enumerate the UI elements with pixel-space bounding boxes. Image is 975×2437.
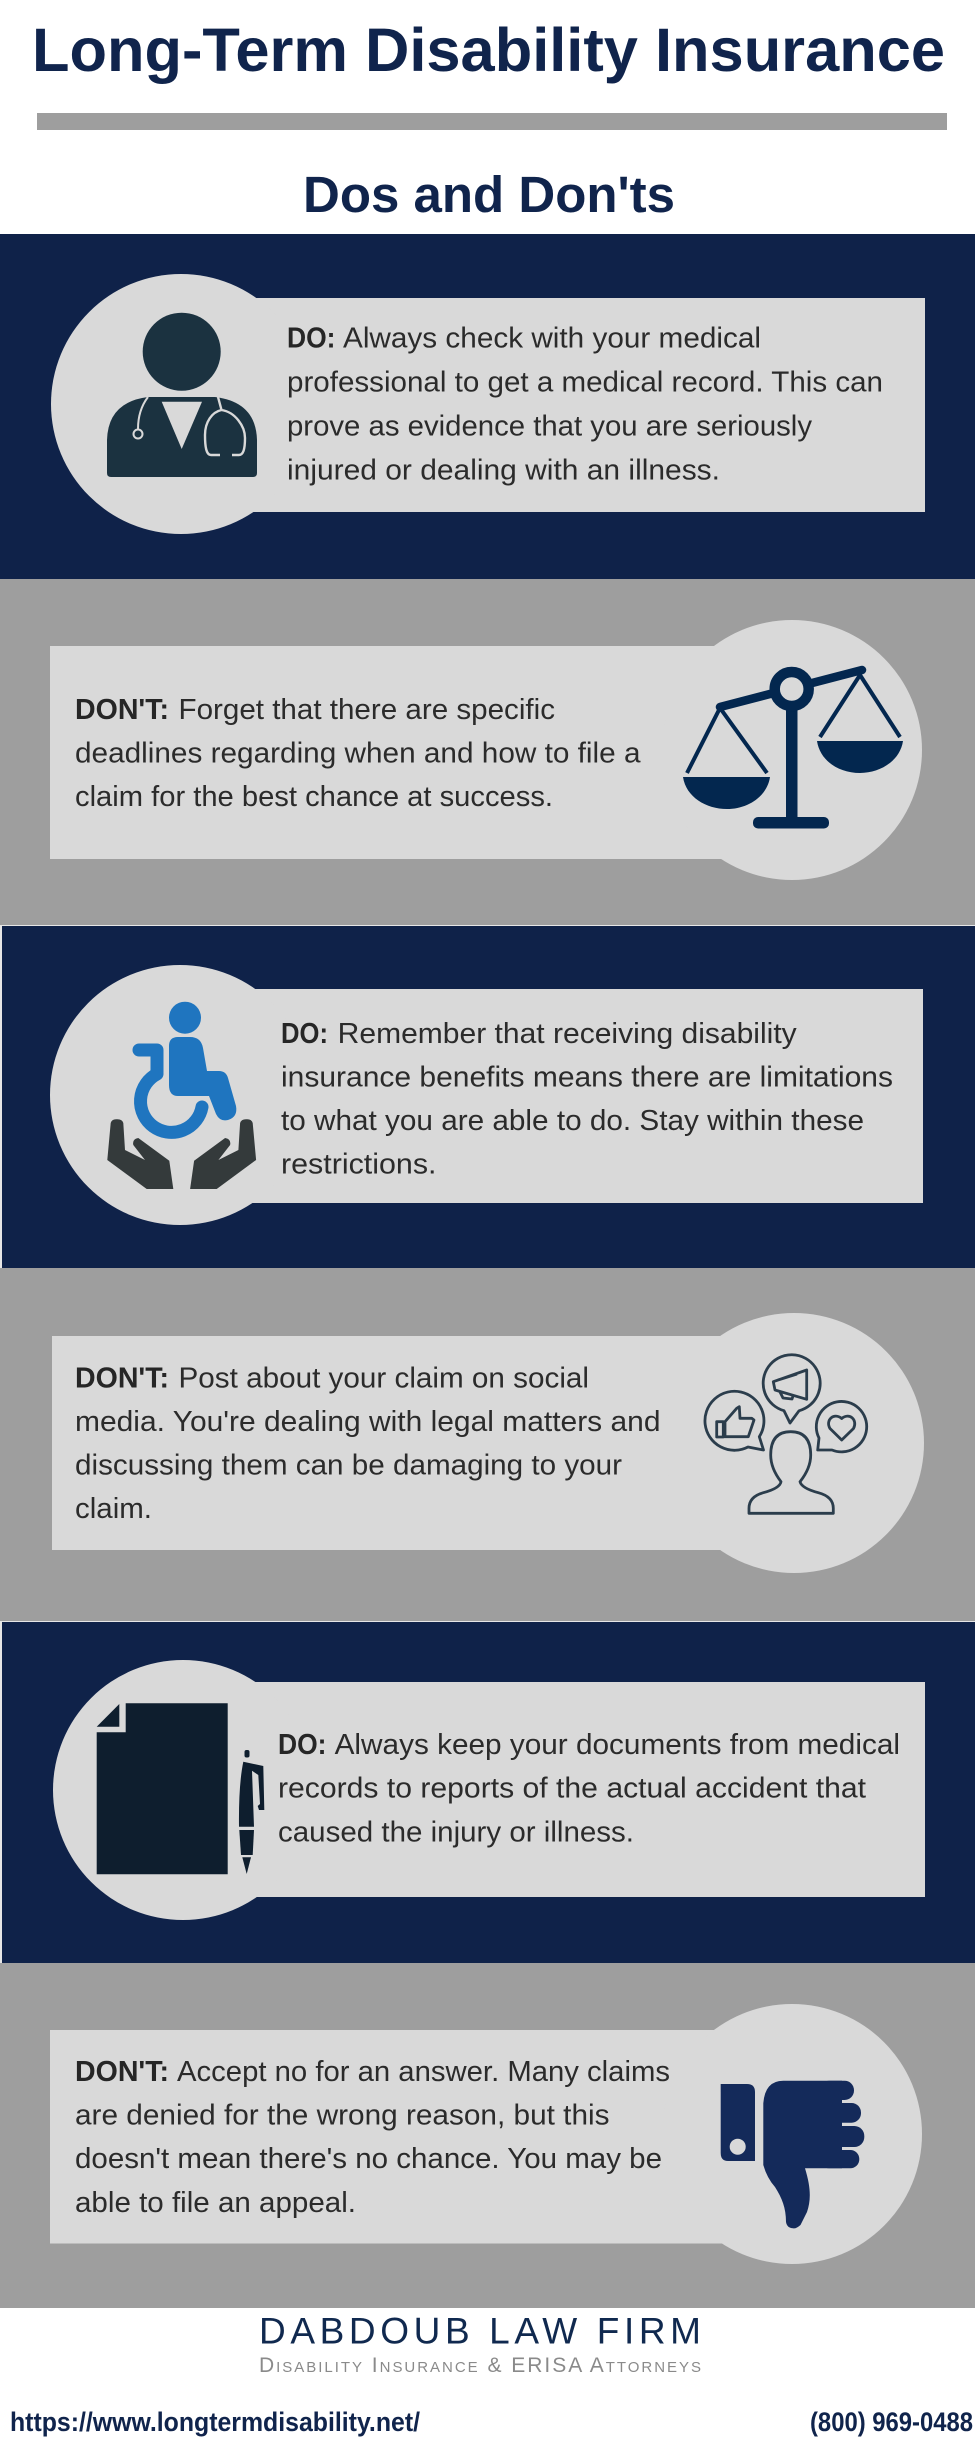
text: don't 3: [75, 2056, 670, 2219]
text: don't 3: able to file an appeal.: [75, 2187, 356, 2219]
icon: doctor: [107, 313, 257, 477]
panel: do, limitations: [0, 925, 975, 1268]
text: do 2: to what you are able to do. Stay within these: [281, 1105, 864, 1137]
text: do 3: Always keep your documents from medical: [335, 1729, 900, 1761]
text: do 1: professional to get a medical record. This can: [287, 366, 883, 398]
text: do 2: [281, 1018, 893, 1180]
icon: wheelchair in hands: [107, 1002, 256, 1189]
text: do 3: DO:: [278, 1729, 326, 1761]
icon: scales: [683, 670, 903, 828]
text: do 1: injured or dealing with an illness.: [287, 454, 720, 486]
panel: don't, deadlines: [0, 579, 975, 925]
text: don't 2: media. You're dealing with legal matters and: [75, 1406, 660, 1438]
panel: don't, social media: [0, 1268, 975, 1621]
text: do 3: [278, 1729, 900, 1849]
title: Long-Term Disability Insurance: [32, 16, 945, 84]
text: do 2: restrictions.: [281, 1148, 436, 1180]
text: don't 1: [75, 694, 641, 813]
text: don't 3: DON'T:: [75, 2056, 169, 2088]
text: do 1: Always check with your medical: [343, 322, 761, 354]
panel: do, medical record: [0, 234, 975, 579]
text: do 1: [287, 322, 883, 486]
text: don't 2: Post about your claim on social: [178, 1362, 589, 1394]
subtitle: Dos and Don'ts: [303, 166, 675, 223]
text: don't 3: doesn't mean there's no chance. You may be: [75, 2143, 662, 2175]
text: do 2: Remember that receiving disability: [338, 1018, 797, 1050]
panel: do, keep documents: [0, 1621, 975, 1963]
panel: don't, accept no: [0, 1963, 975, 2308]
text: do 1: prove as evidence that you are seriously: [287, 410, 812, 442]
footer: website: https://www.longtermdisability.net/: [10, 2407, 420, 2437]
text: don't 1: Forget that there are specific: [178, 694, 555, 726]
text: don't 2: DON'T:: [75, 1362, 169, 1394]
logo: tagline: Disability Insurance & ERISA Attorneys: [259, 2354, 701, 2377]
text: don't 2: discussing them can be damaging to your: [75, 1450, 622, 1482]
text: don't 2: claim.: [75, 1493, 152, 1525]
icon: document and pen: [97, 1703, 264, 1874]
text: don't 3: are denied for the wrong reason, but this: [75, 2099, 610, 2131]
icon: thumbs down: [721, 2081, 864, 2228]
text: don't 3: Accept no for an answer. Many claims: [177, 2056, 670, 2088]
text: do 2: DO:: [281, 1018, 328, 1050]
text: do 2: insurance benefits means there are limitations: [281, 1062, 893, 1094]
text: do 3: records to reports of the actual accident that: [278, 1773, 866, 1805]
text: don't 1: claim for the best chance at success.: [75, 781, 553, 813]
icon: social media person: [705, 1355, 867, 1513]
text: do 1: DO:: [287, 322, 336, 354]
logo: firm name: DABDOUB LAW FIRM: [259, 2310, 701, 2352]
title rule: [37, 113, 947, 130]
text: don't 1: deadlines regarding when and how to file a: [75, 738, 641, 770]
text: don't 1: DON'T:: [75, 694, 169, 726]
text: do 3: caused the injury or illness.: [278, 1817, 634, 1849]
text: don't 2: [75, 1362, 660, 1525]
